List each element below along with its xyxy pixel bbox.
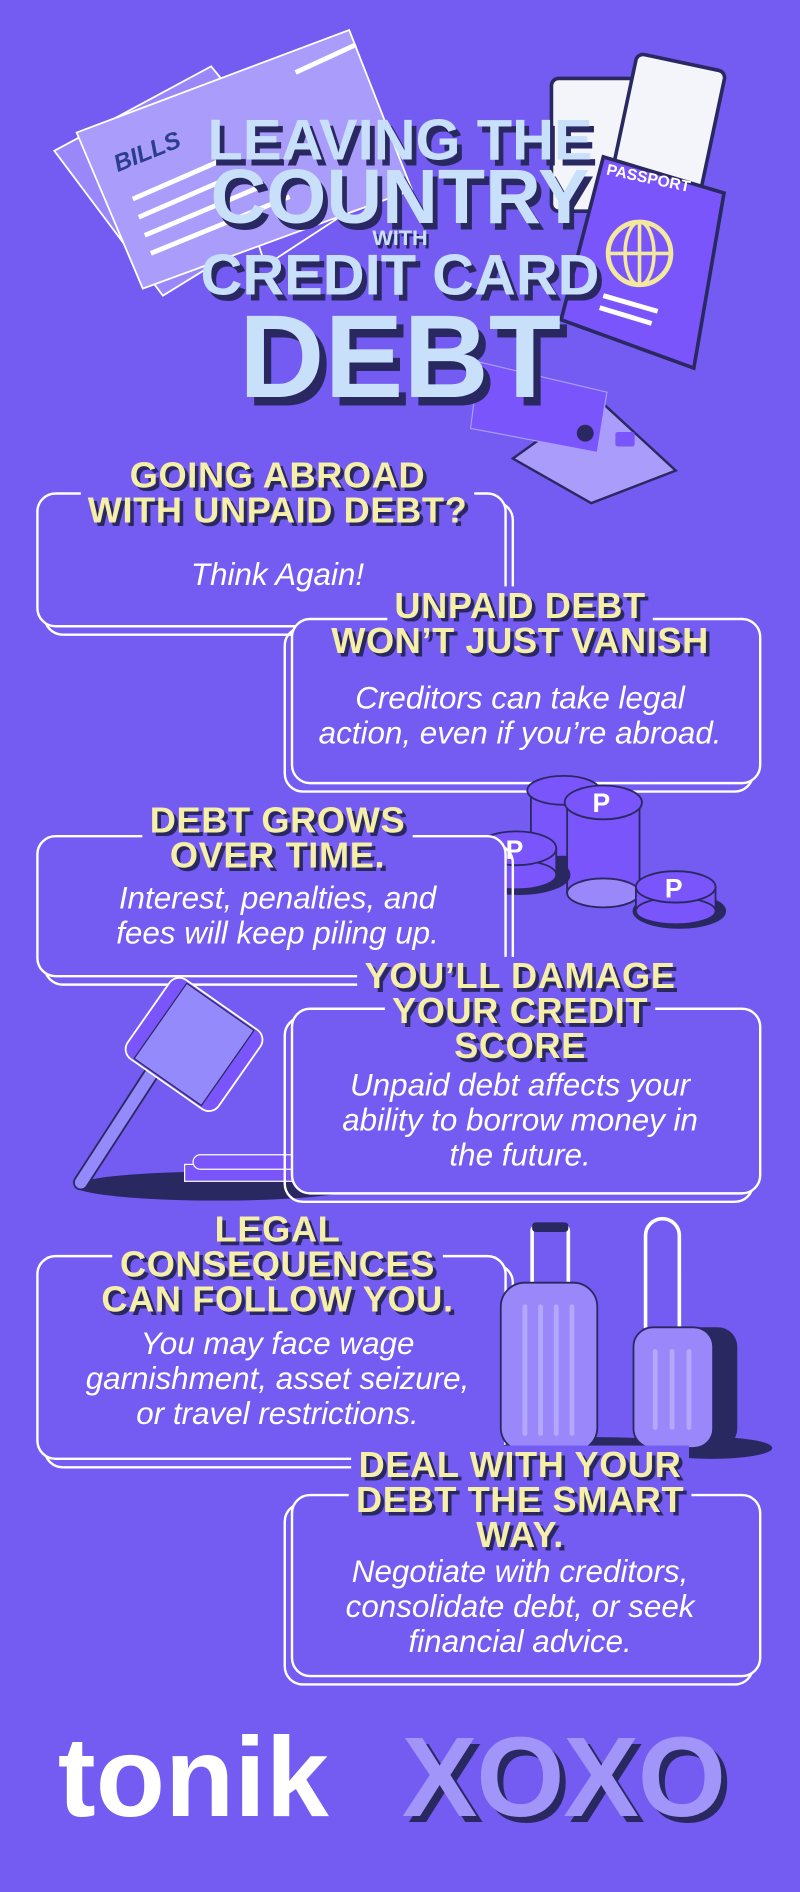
heading: unpaid debt <box>331 586 710 661</box>
heading: debt grows: OVER TIME. <box>170 836 385 876</box>
text: wage garnishment: You may face wage <box>141 1325 414 1361</box>
heading: legal consequences: LEGAL <box>215 1210 340 1250</box>
heading: smart way: DEBT THE SMART <box>356 1481 684 1520</box>
heading: going abroad: GOING ABROAD <box>130 456 425 496</box>
panel: legal consequences <box>36 1210 514 1468</box>
illustration: suitcases <box>500 1216 772 1459</box>
title <box>201 109 602 422</box>
heading: credit score: YOUR CREDIT <box>392 992 648 1032</box>
logo: xoxo: XOXO <box>402 1713 725 1840</box>
panel: unpaid debt <box>284 586 762 793</box>
heading: legal consequences: CAN FOLLOW YOU. <box>101 1280 454 1320</box>
illustration: coins: P <box>665 874 683 904</box>
illustration: bills envelope: BILLS <box>110 127 185 178</box>
text: interest <box>116 880 439 951</box>
title: LEAVING THE <box>207 109 593 173</box>
text: interest: Interest, penalties, and <box>119 880 436 916</box>
text: negotiate: Negotiate with creditors, <box>352 1553 688 1589</box>
text: unpaid debt affects <box>342 1067 698 1173</box>
illustration: gavel <box>73 977 333 1201</box>
heading: unpaid debt: UNPAID DEBT <box>394 586 646 626</box>
heading: legal consequences: CONSEQUENCES <box>120 1245 435 1285</box>
illustration: bills envelope <box>53 28 413 297</box>
text: unpaid debt affects: the future. <box>449 1137 591 1173</box>
heading: unpaid debt: WON’T JUST VANISH <box>331 621 709 661</box>
panel: smart way <box>284 1446 762 1686</box>
heading: credit score: YOU’LL DAMAGE <box>365 957 675 997</box>
illustration: credit cards <box>470 361 678 504</box>
text: creditors: Creditors can take legal <box>355 679 685 716</box>
heading: credit score <box>357 956 678 1067</box>
text: wage garnishment: garnishment, asset seizure, <box>86 1360 469 1396</box>
illustration: passport and tickets: PASSPORT <box>605 162 692 196</box>
title: COUNTRY <box>211 153 589 240</box>
heading: debt grows: DEBT GROWS <box>150 801 405 841</box>
heading: debt grows <box>142 801 413 876</box>
text: negotiate: consolidate debt, or seek <box>346 1588 694 1624</box>
heading: going abroad <box>80 456 474 531</box>
illustration: coins: P <box>506 835 523 865</box>
illustration: coins: P <box>592 788 610 818</box>
illustration: coins <box>488 775 726 929</box>
panel: credit score <box>284 956 762 1203</box>
heading: smart way: WAY. <box>476 1516 564 1555</box>
heading: credit score: SCORE <box>454 1027 586 1067</box>
illustration: passport and tickets <box>550 52 726 370</box>
text: think again: Think Again! <box>191 556 364 592</box>
heading: smart way: DEAL WITH YOUR <box>359 1446 681 1485</box>
text: unpaid debt affects: Unpaid debt affects your <box>350 1067 690 1103</box>
heading: smart way <box>348 1446 692 1555</box>
text: wage garnishment: or travel restrictions. <box>136 1395 419 1431</box>
text: wage garnishment <box>86 1325 469 1431</box>
panel: debt grows <box>36 801 514 986</box>
text: unpaid debt affects: ability to borrow money in <box>342 1102 698 1138</box>
title: WITH <box>372 226 428 250</box>
title: DEBT <box>239 290 561 422</box>
text: creditors: action, even if you’re abroad. <box>319 714 721 751</box>
text: interest: fees will keep piling up. <box>116 915 439 951</box>
text: negotiate <box>346 1553 696 1659</box>
text: negotiate: financial advice. <box>408 1623 632 1659</box>
text: creditors <box>319 679 721 751</box>
logo: tonik: tonik <box>58 1713 329 1840</box>
heading: going abroad: WITH UNPAID DEBT? <box>88 491 467 531</box>
panel: going abroad <box>36 456 514 636</box>
title: CREDIT CARD <box>201 244 599 308</box>
heading: legal consequences <box>101 1210 454 1320</box>
